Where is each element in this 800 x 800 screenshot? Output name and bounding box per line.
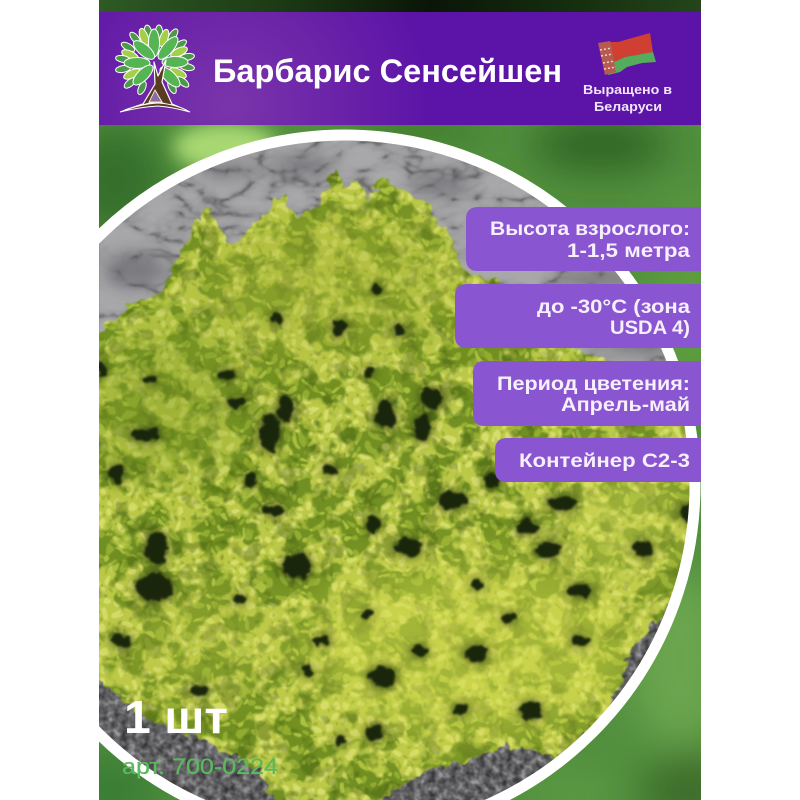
panel: flowering period: Апрель-май bbox=[561, 394, 690, 416]
grown in Belarus label: Выращено в bbox=[583, 82, 672, 97]
logo base arcs bbox=[120, 103, 190, 112]
pebbles ground bbox=[99, 604, 668, 800]
title: Барбарис Сенсейшен bbox=[213, 53, 562, 89]
panel: container bbox=[495, 438, 701, 482]
barberry bush bbox=[90, 150, 710, 800]
panel: height: 1-1,5 метра bbox=[567, 240, 690, 262]
panel: frost hardiness: до -30°C (зона bbox=[537, 296, 690, 318]
photo panel bbox=[99, 0, 701, 800]
quantity label: 1 шт bbox=[124, 691, 228, 743]
flag ornament strip bbox=[598, 41, 616, 75]
icon: tree logo bbox=[115, 24, 195, 112]
header band bbox=[99, 12, 701, 125]
infographic canvas bbox=[99, 0, 701, 800]
leaf base layer bbox=[90, 150, 710, 800]
circular plant photo bbox=[90, 130, 710, 800]
flag red field bbox=[608, 33, 653, 63]
icon: Belarus flag bbox=[598, 33, 656, 75]
white circle outline bbox=[99, 130, 700, 800]
panel: flowering period bbox=[473, 361, 701, 426]
logo trunk bbox=[125, 60, 186, 110]
panel: height: Высота взрослого: bbox=[490, 218, 690, 240]
panel: container: Контейнер C2-3 bbox=[519, 450, 690, 472]
panel: frost hardiness bbox=[455, 284, 701, 348]
dark gaps between branches bbox=[98, 282, 692, 746]
bright leaf clumps bbox=[90, 150, 710, 800]
shaded foliage bbox=[90, 150, 710, 800]
grown in Belarus label: Беларуси bbox=[594, 99, 662, 114]
cracked grey soil bbox=[99, 140, 666, 361]
logo leaves bbox=[115, 24, 195, 96]
panel: frost hardiness: USDA 4) bbox=[610, 317, 690, 339]
panel: height bbox=[466, 207, 701, 271]
bush tonal shading bbox=[90, 210, 690, 740]
flag green field bbox=[608, 52, 656, 75]
article number: арт. 700-0224 bbox=[122, 754, 278, 779]
grown in Belarus label bbox=[584, 85, 672, 114]
blurred green background bbox=[99, 0, 701, 800]
panel: flowering period: Период цветения: bbox=[497, 373, 690, 395]
